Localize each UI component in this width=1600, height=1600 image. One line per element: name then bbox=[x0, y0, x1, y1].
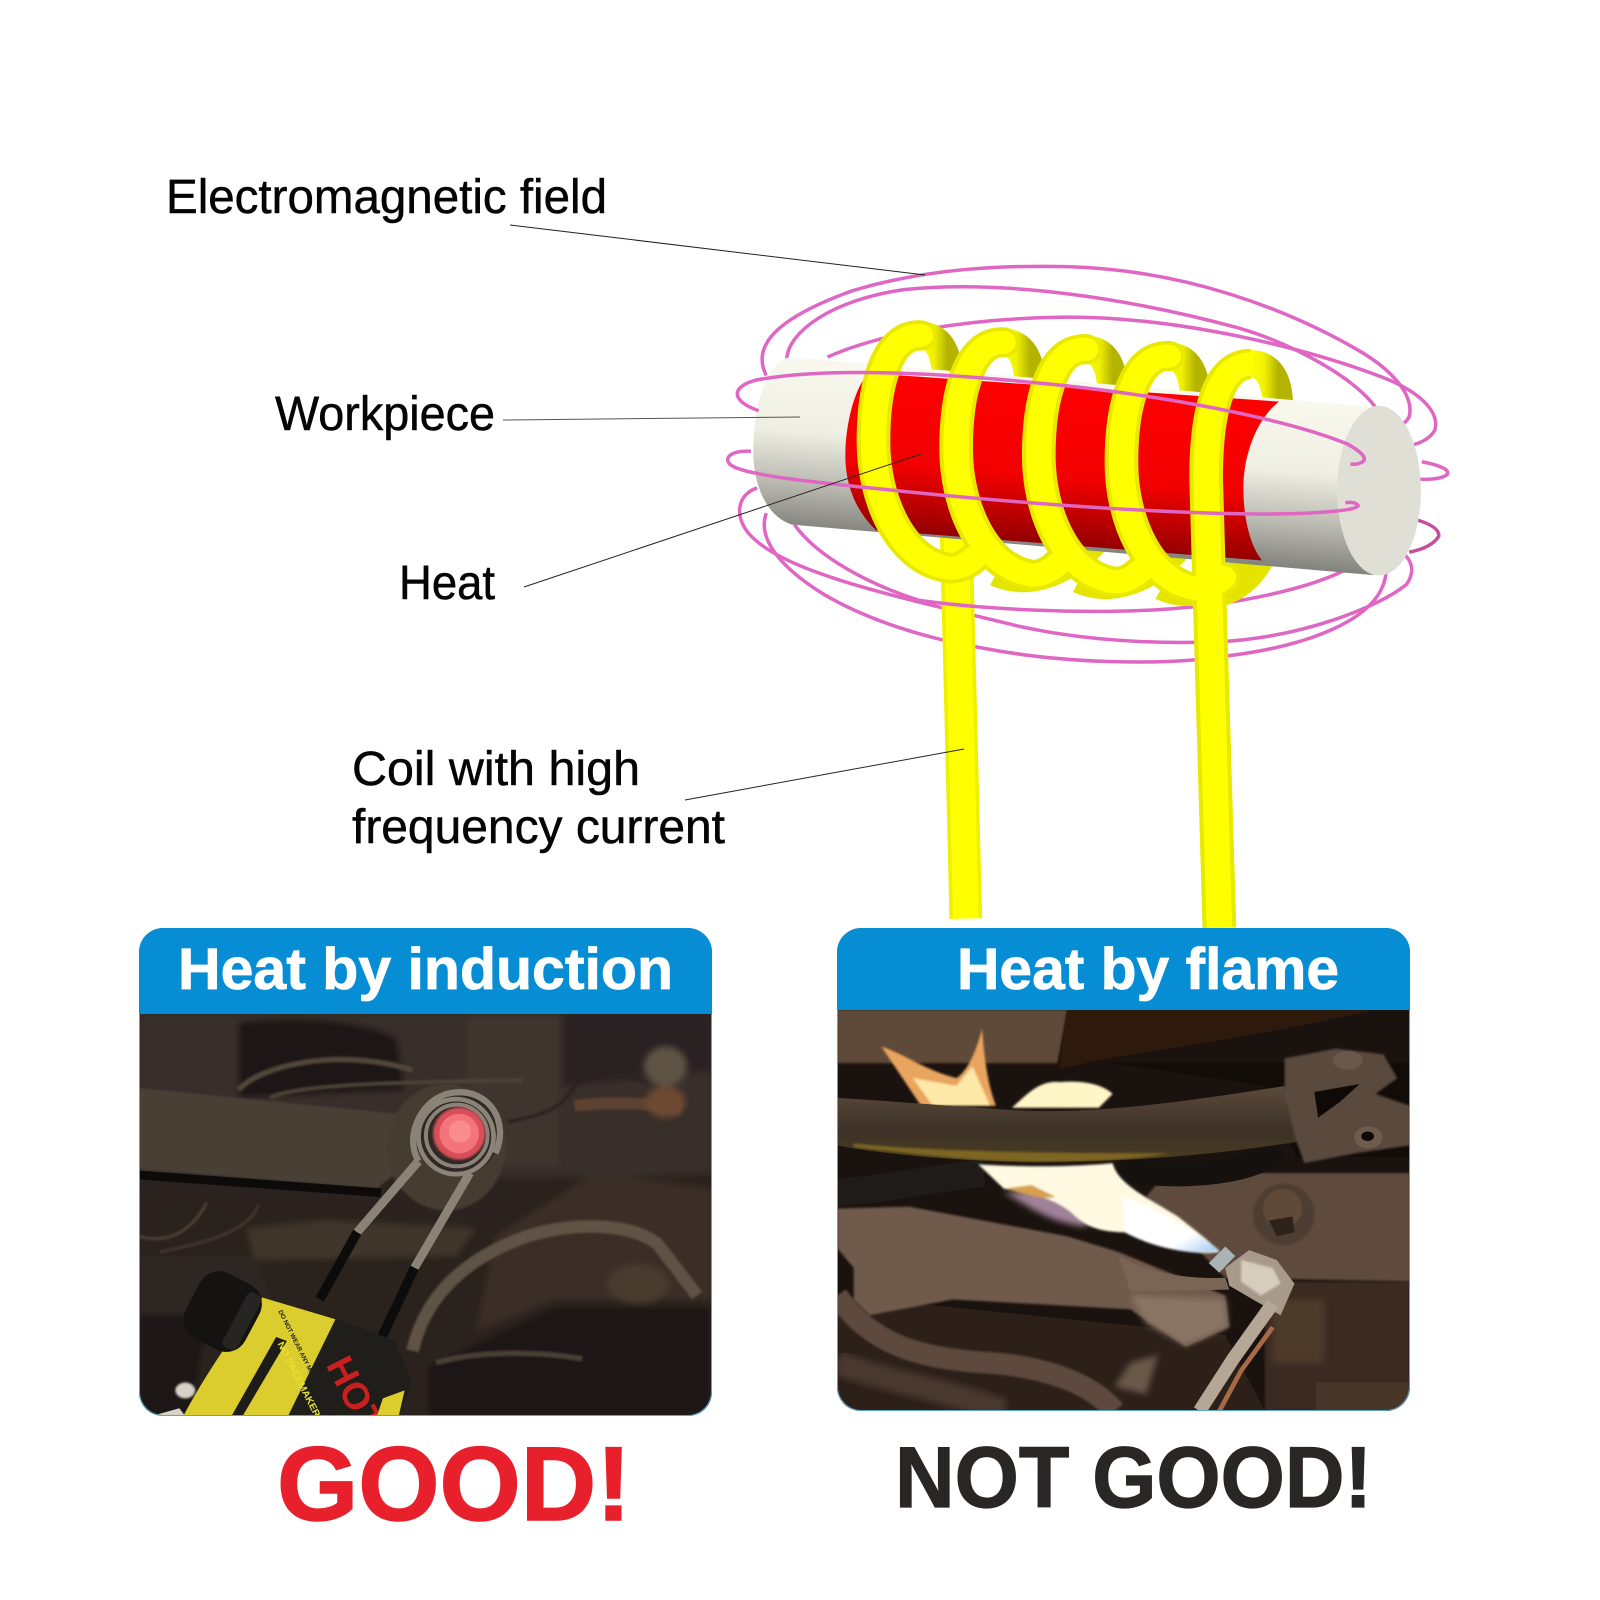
control arm bbox=[837, 1207, 1229, 1347]
universal joint bbox=[1285, 1048, 1410, 1163]
left coil lead bbox=[956, 529, 966, 919]
header: Heat by flame bbox=[837, 928, 1410, 1010]
verdict: NOT GOOD!: NOT GOOD! bbox=[895, 1430, 1372, 1526]
panel: heat by flame bbox=[837, 928, 1410, 1411]
verdict: GOOD!: GOOD! bbox=[277, 1426, 631, 1543]
header: Heat by flame: Heat by flame bbox=[957, 937, 1339, 1002]
workpiece end cap bbox=[1337, 406, 1421, 576]
label: Workpiece: Workpiece bbox=[275, 388, 495, 441]
heated zone bbox=[845, 373, 1279, 560]
field lines behind coil bbox=[762, 266, 1448, 611]
header: Heat by induction bbox=[139, 928, 712, 1014]
black hoses bbox=[837, 1173, 984, 1193]
coil front turns bbox=[873, 335, 1251, 928]
workpiece cylinder bbox=[753, 357, 1381, 575]
photo: induction heater on suspension bolt: NO PACEMAKER bbox=[275, 1340, 322, 1419]
upper flame bbox=[881, 1029, 1113, 1108]
control arm bbox=[139, 1088, 405, 1189]
label: Coil with high frequency current: frequency current bbox=[352, 801, 725, 854]
label: Coil with high frequency current: Coil with high bbox=[352, 743, 640, 796]
rust fittings bbox=[606, 1046, 687, 1303]
photo: torch flame on rod bbox=[837, 1000, 1410, 1411]
lower plate bbox=[1146, 1173, 1410, 1282]
photo: induction heater on suspension bolt: DO NOT WEAR ANY METAL OBJECTS bbox=[276, 1309, 335, 1415]
field lines behind leads bbox=[740, 488, 1412, 662]
glowing bolt bbox=[433, 1107, 485, 1160]
tool body bbox=[286, 1317, 412, 1416]
photo: induction heater on suspension bolt: HOT bbox=[318, 1349, 392, 1439]
bushing and coil bbox=[387, 1084, 505, 1211]
panel outline bbox=[838, 928, 1410, 1410]
photo: induction heater on suspension bolt bbox=[139, 1000, 712, 1439]
lower left dark area bbox=[837, 1296, 1265, 1411]
torch head bbox=[1209, 1247, 1235, 1273]
label: Electromagnetic field: Electromagnetic field bbox=[166, 171, 607, 224]
panel: heat by induction bbox=[139, 928, 712, 1439]
diagram: induction coil around workpiece bbox=[728, 266, 1448, 928]
lower right dark block bbox=[1265, 1282, 1410, 1411]
lower flame bbox=[1003, 1190, 1092, 1230]
header: Heat by induction: Heat by induction bbox=[178, 937, 673, 1002]
coil back arcs bbox=[920, 335, 1278, 427]
leader lines bbox=[503, 225, 964, 800]
label: Heat: Heat bbox=[399, 557, 495, 610]
field lines in front bbox=[728, 372, 1364, 514]
panel outline bbox=[140, 928, 712, 1416]
steering rod bbox=[837, 1086, 1300, 1162]
